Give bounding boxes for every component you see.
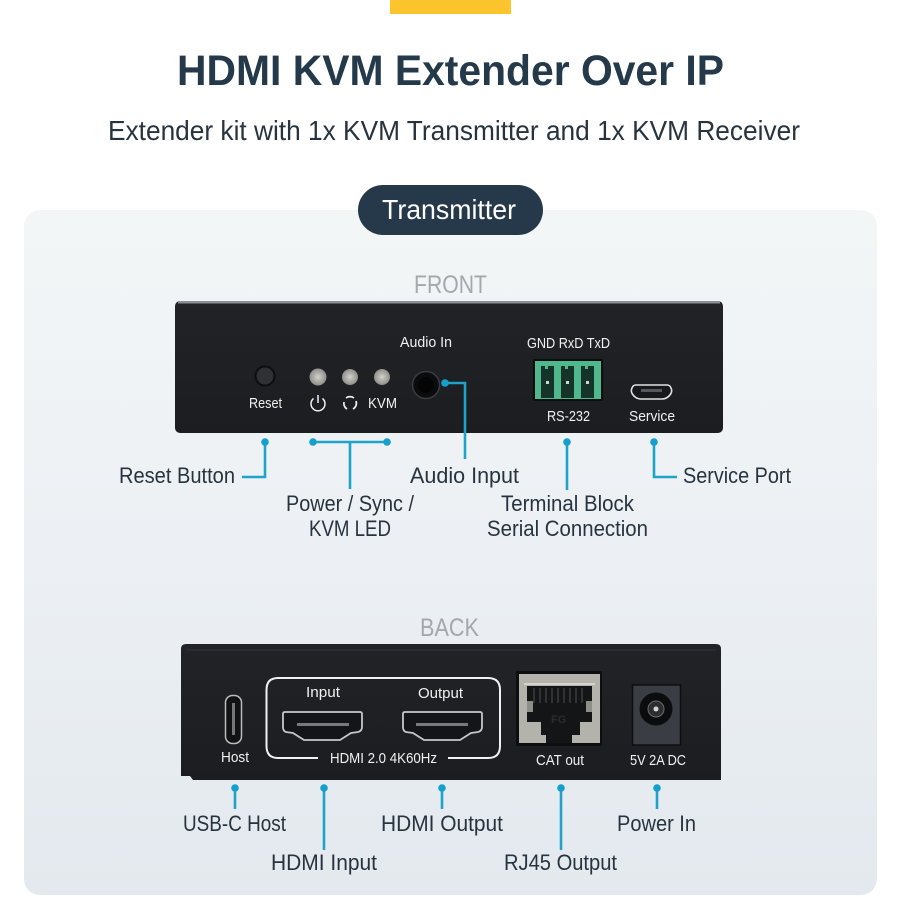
callout: HDMI output: [381, 784, 503, 836]
callout: USB-C host: USB-C Host: [183, 811, 286, 836]
RJ45 port: CAT out: [536, 752, 585, 769]
panel: transmitter: [24, 185, 877, 895]
HDMI input port: Input: [306, 684, 341, 701]
HDMI input port: [283, 684, 362, 740]
reset button: [249, 366, 283, 412]
callout: reset button: [119, 438, 269, 488]
terminal block: [527, 335, 610, 425]
callout: service port: [650, 438, 791, 488]
back device: [181, 644, 721, 780]
audio jack: [400, 334, 452, 398]
callout: RJ45 output: RJ45 Output: [504, 850, 617, 875]
callout: LEDs: [286, 438, 415, 541]
terminal block: RS-232: [547, 408, 590, 425]
callout: power in: [617, 784, 696, 836]
status LEDs: [310, 368, 397, 412]
HDMI group frame: [266, 678, 500, 767]
terminal block: GND RxD TxD: [527, 335, 610, 352]
subtitle: Extender kit with 1x KVM Transmitter and 1x KVM Receiver: [108, 115, 800, 146]
badge: Transmitter: [358, 185, 543, 235]
RJ45 port: FG: [551, 714, 566, 726]
yellow accent bar: [390, 0, 511, 14]
HDMI group frame: HDMI 2.0 4K60Hz: [330, 750, 437, 767]
callout: reset button: Reset Button: [119, 463, 235, 488]
callout: audio input: Audio Input: [410, 463, 519, 488]
callout: HDMI input: HDMI Input: [271, 850, 377, 875]
badge: Transmitter: Transmitter: [382, 194, 516, 225]
callout: HDMI input: [271, 784, 377, 875]
heading: BACK: BACK: [420, 614, 479, 642]
RJ45 port: [516, 671, 602, 769]
HDMI output port: Output: [418, 685, 464, 702]
reset button: Reset: [249, 395, 283, 412]
callout: audio input: [410, 379, 519, 488]
callout: terminal block: Serial Connection: [487, 516, 648, 541]
callout: LEDs: KVM LED: [309, 516, 391, 541]
DC power jack: [630, 685, 686, 769]
callout: terminal block: [487, 438, 648, 541]
USB-C port: [221, 696, 250, 766]
callout: HDMI output: HDMI Output: [381, 811, 503, 836]
heading: FRONT: FRONT: [414, 271, 487, 299]
status LEDs: KVM: [368, 395, 397, 412]
title: HDMI KVM Extender Over IP: [177, 47, 724, 95]
callout: service port: Service Port: [683, 463, 791, 488]
USB-C port: Host: [221, 749, 250, 766]
callout: LEDs: Power / Sync /: [286, 491, 415, 516]
DC power jack: 5V 2A DC: [630, 752, 686, 769]
HDMI output port: [403, 685, 482, 740]
callout: terminal block: Terminal Block: [501, 491, 635, 516]
callout: RJ45 output: [504, 784, 617, 875]
callout: power in: Power In: [617, 811, 696, 836]
callout: USB-C host: [183, 784, 286, 836]
micro USB service port: Service: [629, 408, 675, 425]
micro USB service port: [629, 385, 675, 425]
audio jack: Audio In: [400, 334, 452, 351]
front device: [175, 301, 723, 433]
